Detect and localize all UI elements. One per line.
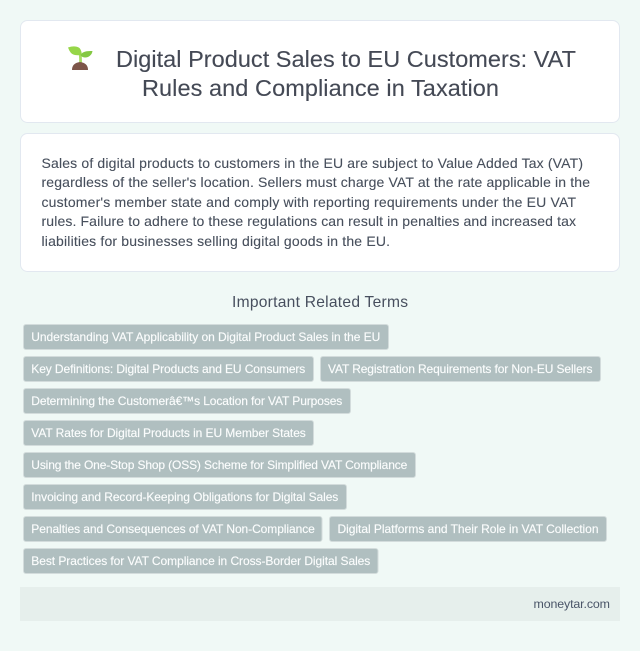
panel: related term chips (24, 324, 606, 574)
text block: summary paragraph: regardless of the seller's location. Sellers must charge VAT at the rate applicable in the (42, 174, 590, 190)
chip: OSS scheme: Using the One-Stop Shop (OSS) Scheme for Simplified VAT Compliance (31, 458, 408, 472)
chip: VAT rates (24, 420, 314, 446)
chip: VAT applicability (24, 324, 388, 350)
title: Rules and Compliance in Taxation (142, 75, 499, 101)
icon: sprout (68, 46, 92, 70)
title: Digital Product Sales to EU Customers: VAT (116, 46, 576, 72)
text block: summary paragraph: customer's member state and comply with reporting requirements under the EU VAT (42, 194, 576, 210)
text block: summary paragraph (42, 155, 590, 249)
chip: OSS scheme (24, 452, 416, 478)
chip: best practices: Best Practices for VAT Compliance in Cross-Border Digital Sales (31, 554, 370, 568)
chip: key definitions: Key Definitions: Digital Products and EU Consumers (31, 362, 305, 376)
chip: penalties (24, 516, 322, 542)
chip: penalties: Penalties and Consequences of VAT Non-Compliance (31, 522, 315, 536)
chip: best practices (24, 548, 378, 574)
chip: invoicing: Invoicing and Record-Keeping Obligations for Digital Sales (31, 490, 338, 504)
heading: related terms: Important Related Terms (232, 294, 408, 311)
title (116, 46, 576, 101)
chip: invoicing (24, 484, 346, 510)
chip: registration requirements (320, 356, 600, 382)
chip: VAT applicability: Understanding VAT Applicability on Digital Product Sales in the EU (31, 330, 380, 344)
chip: customer location: Determining the Customerâ€™s Location for VAT Purposes (31, 394, 342, 408)
footer source label: moneytar.com (534, 597, 610, 611)
text block: summary paragraph: Sales of digital products to customers in the EU are subject to Value Added Tax (VAT) (42, 155, 583, 171)
chip: digital platforms: Digital Platforms and Their Role in VAT Collection (338, 522, 598, 536)
text block: summary paragraph: rules. Failure to adhere to these regulations can result in penalties and increased tax (42, 213, 576, 229)
chip: key definitions (24, 356, 314, 382)
footer (20, 587, 620, 621)
chip: customer location (24, 388, 350, 414)
chip: registration requirements: VAT Registration Requirements for Non-EU Sellers (328, 362, 592, 376)
text block: summary paragraph: liabilities for businesses selling digital goods in the EU. (42, 233, 390, 249)
panel: summary (20, 134, 620, 272)
panel: title header (20, 20, 620, 122)
chip: digital platforms (330, 516, 606, 542)
chip: VAT rates: VAT Rates for Digital Products in EU Member States (31, 426, 306, 440)
